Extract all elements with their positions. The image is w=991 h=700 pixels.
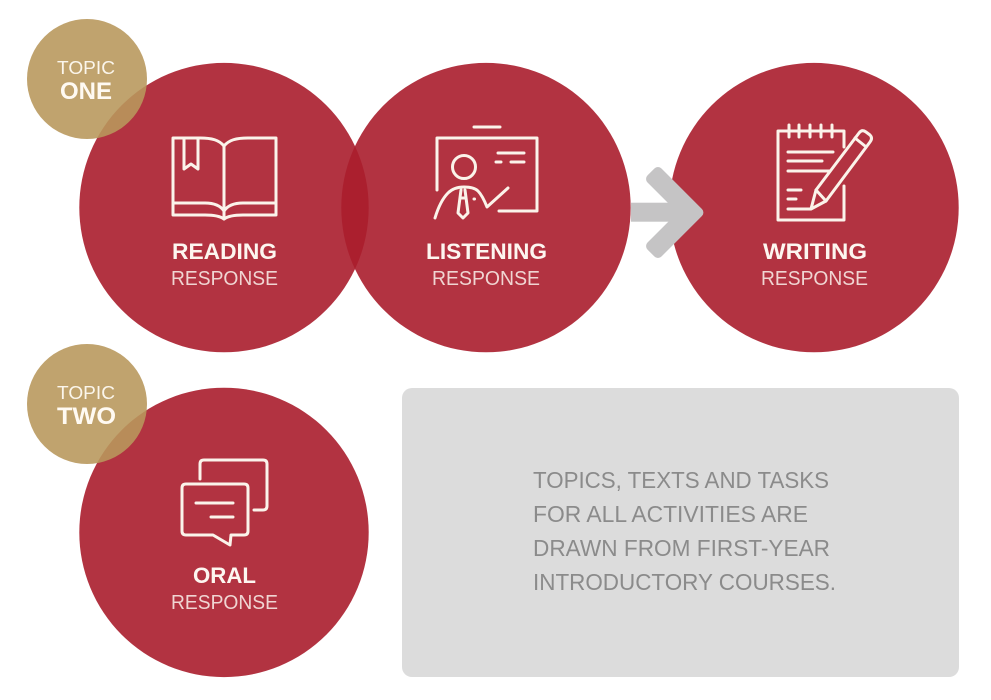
badge: topic two bbox=[27, 344, 147, 464]
icon: speech bubbles bbox=[182, 460, 267, 545]
label: listening response: RESPONSE bbox=[432, 268, 540, 290]
label: reading: READING bbox=[172, 239, 277, 264]
label: writing: WRITING bbox=[763, 239, 867, 264]
badge: topic one bbox=[27, 19, 147, 139]
label: reading response: RESPONSE bbox=[171, 268, 278, 290]
circle: reading bbox=[79, 63, 369, 352]
circle: writing bbox=[669, 63, 959, 352]
label: oral response: RESPONSE bbox=[171, 592, 278, 614]
panel: note: INTRODUCTORY COURSES. bbox=[533, 569, 836, 595]
panel: note: TOPICS, TEXTS AND TASKS bbox=[533, 467, 829, 493]
panel: note: DRAWN FROM FIRST-YEAR bbox=[533, 535, 830, 561]
label: listening: LISTENING bbox=[426, 239, 547, 264]
badge: topic two: TWO bbox=[57, 403, 116, 430]
badge: topic one: ONE bbox=[60, 78, 112, 105]
circle: oral bbox=[79, 388, 369, 677]
icon: teacher at board bbox=[435, 127, 537, 218]
icon: notepad and pencil bbox=[778, 125, 872, 220]
panel: note bbox=[402, 388, 959, 677]
arrow: listening to writing bbox=[631, 172, 698, 253]
badge: topic one: TOPIC bbox=[57, 58, 115, 78]
circle: listening bbox=[341, 63, 631, 352]
panel: note: FOR ALL ACTIVITIES ARE bbox=[533, 501, 808, 527]
label: oral: ORAL bbox=[193, 563, 256, 588]
badge: topic two: TOPIC bbox=[57, 383, 115, 403]
label: writing response: RESPONSE bbox=[761, 268, 868, 290]
icon: open book bbox=[173, 138, 276, 219]
